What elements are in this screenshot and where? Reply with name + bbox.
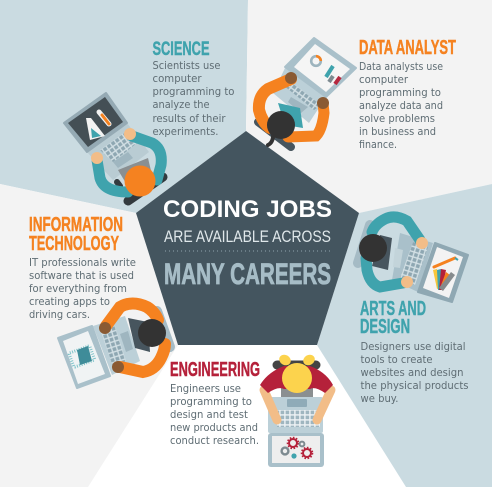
icon: colour swatches and brush [433, 258, 458, 291]
panel: data analyst [359, 37, 456, 151]
text block: data analyst: in business and [359, 125, 436, 138]
text block: data analyst: solve problems [359, 112, 435, 125]
text block: science: analyze the [152, 98, 210, 111]
text block: data analyst: finance. [359, 138, 397, 151]
heading: arts and design [360, 298, 426, 338]
text block: science: computer [152, 72, 202, 85]
icon: gears [282, 438, 312, 459]
icon: designer at laptop [358, 217, 468, 302]
text block: information technology: IT professionals write [29, 256, 136, 269]
text block: science: experiments. [152, 125, 218, 138]
text block: arts and design: the physical products [360, 379, 469, 392]
panel: engineering [170, 359, 260, 447]
text block: information technology: software that is used [29, 269, 134, 282]
text block: science [152, 59, 235, 138]
text block: science: programming to [152, 85, 235, 98]
text block: arts and design: we buy. [360, 392, 398, 405]
text block: arts and design: Designers use digital [360, 340, 466, 353]
text block: data analyst [359, 60, 443, 151]
heading: information technology [29, 214, 123, 255]
central pentagon panel [136, 131, 359, 345]
text block: engineering: conduct research. [170, 434, 259, 447]
text block: engineering: Engineers use [170, 382, 241, 395]
text block: information technology [29, 256, 136, 321]
heading: engineering: ENGINEERING [170, 359, 260, 381]
text block: arts and design [360, 340, 469, 405]
heading: arts and design: DESIGN [360, 316, 410, 338]
text block: information technology: for everything from [29, 282, 127, 295]
icon: IT professional at laptop [58, 304, 170, 388]
icon: data analyst at laptop [258, 38, 356, 147]
text block: engineering: programming to [170, 395, 252, 408]
title: many careers: MANY CAREERS [164, 258, 331, 291]
text block: data analyst: analyze data and [359, 99, 443, 112]
panel: information technology [29, 214, 136, 321]
text block: engineering [170, 382, 259, 447]
panel: science [152, 38, 235, 138]
text block: data analyst: Data analysts use [359, 60, 443, 73]
heading: information technology: TECHNOLOGY [29, 233, 119, 255]
icon: engineer at laptop [260, 353, 333, 467]
subtitle: are available across: ARE AVAILABLE ACROSS [164, 228, 331, 246]
text block: engineering: design and test [170, 408, 248, 421]
heading: science: SCIENCE [152, 38, 210, 60]
text block: data analyst: programming to [359, 86, 441, 99]
panel: arts and design [360, 298, 469, 405]
text block: arts and design: websites and design [360, 366, 464, 379]
text block: science: results of their [152, 112, 226, 125]
text block: information technology: creating apps to [29, 295, 110, 308]
title: coding jobs: CODING JOBS [163, 196, 332, 223]
text block: arts and design: tools to create [360, 353, 433, 366]
text block: engineering: new products and [170, 421, 258, 434]
heading: information technology: INFORMATION [29, 214, 123, 236]
text block: information technology: driving cars. [29, 308, 90, 321]
icon: scientist at laptop [64, 93, 163, 201]
text block: data analyst: computer [359, 73, 409, 86]
heading: arts and design: ARTS AND [360, 298, 426, 320]
text block: science: Scientists use [152, 59, 221, 72]
